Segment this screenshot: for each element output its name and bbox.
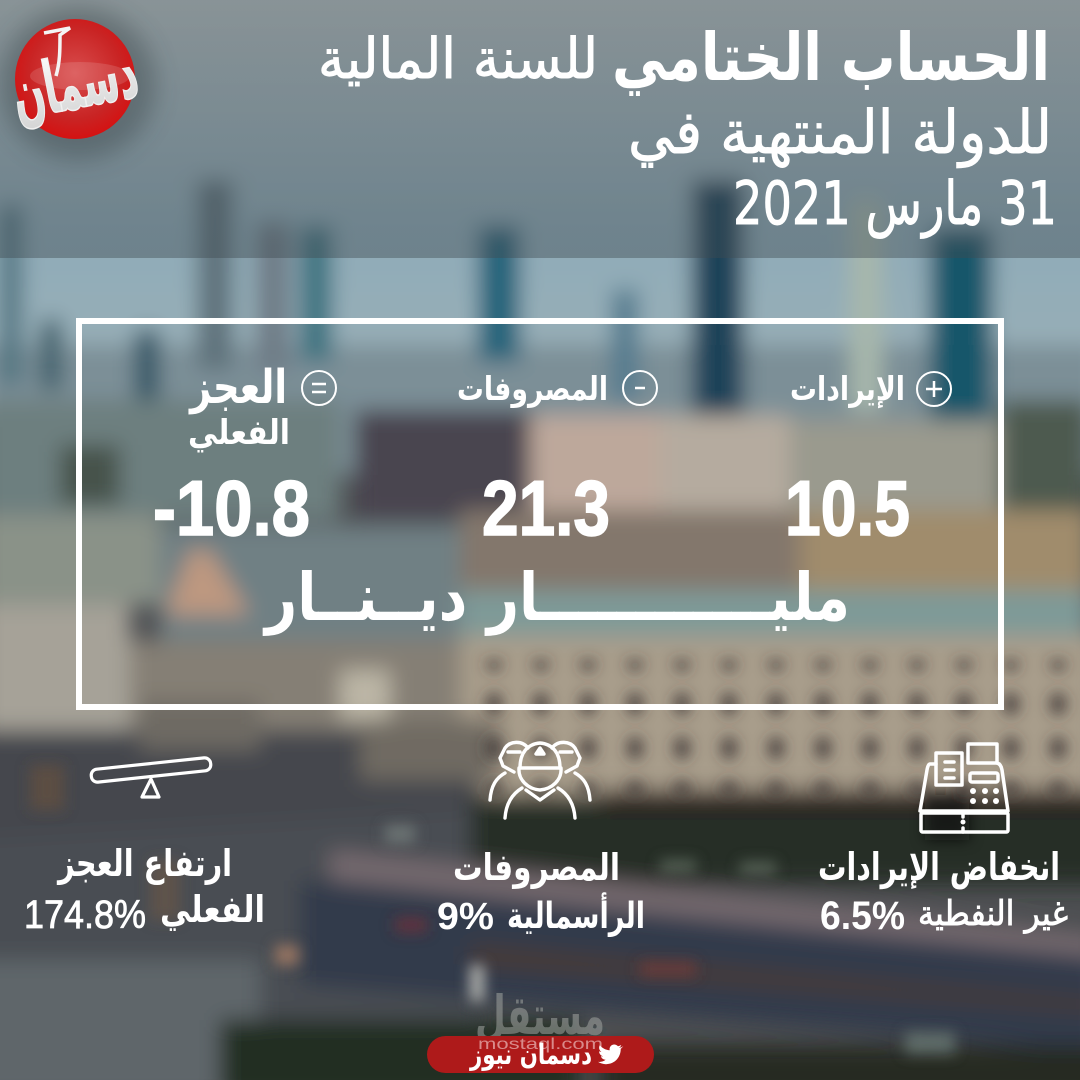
stat: revenue drop: 6.5% [820, 894, 905, 938]
expenses column: المصروفات [457, 369, 608, 409]
stat: capital expenses [437, 846, 645, 938]
title: للدولة المنتهية في [628, 98, 1052, 168]
deficit column [153, 360, 336, 552]
twitter handle pill: mostaql.com [478, 1036, 603, 1053]
stat: deficit rise: 174.8% [24, 893, 146, 937]
revenue column: 10.5 [785, 464, 910, 552]
revenue column [785, 369, 951, 552]
unit label: مليــــــــــــار ديــنــار [262, 559, 850, 636]
stat: capital expenses: الرأسمالية [507, 892, 645, 937]
stat: deficit rise: ارتفاع العجز [56, 842, 232, 885]
logo: دسمان [5, 30, 145, 136]
revenue column: الإيرادات [790, 369, 905, 409]
twitter handle pill: دسمان نيوز [468, 1038, 592, 1071]
icon: people group [490, 742, 590, 818]
logo [0, 8, 156, 160]
icon: balance seesaw [91, 757, 211, 797]
watermark: مستقل [475, 984, 605, 1047]
stat: deficit rise: الفعلي [160, 888, 265, 931]
stat: revenue drop: غير النفطية [918, 894, 1068, 934]
stat: capital expenses: المصروفات [453, 846, 620, 889]
background details [30, 660, 1080, 1054]
top band overlay [0, 0, 1080, 258]
expenses column [457, 369, 657, 552]
deficit column: الفعلي [188, 413, 290, 453]
title [318, 19, 1057, 239]
title: للسنة المالية [318, 27, 598, 92]
twitter handle pill [427, 1036, 654, 1073]
icon: cash register [920, 744, 1008, 832]
deficit column: العجز [188, 360, 287, 415]
expenses column: 21.3 [482, 464, 610, 552]
panel: totals box [79, 321, 1001, 707]
stat: revenue drop [818, 845, 1068, 938]
stat: deficit rise [24, 842, 265, 937]
stat: capital expenses: 9% [437, 896, 494, 938]
deficit column: -10.8 [153, 464, 310, 552]
title: 31 مارس 2021 [733, 169, 1057, 239]
